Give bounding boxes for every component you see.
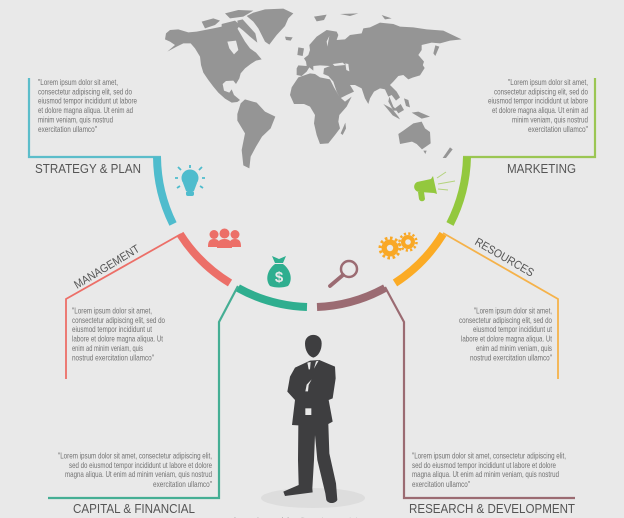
text block: research & development	[412, 450, 566, 489]
text block: management: enim ad minim veniam, quis	[72, 343, 143, 353]
text block: research & development: exercitation ullamco"	[412, 479, 470, 489]
text block: capital & financial: "Lorem ipsum dolor sit amet, consectetur adipiscing elit,	[58, 450, 212, 460]
text block: resources: consectetur adipiscing elit, sed do	[459, 315, 552, 325]
text block: research & development: sed do eiusmod tempor incididunt ut labore et dolore	[412, 460, 556, 470]
text block: capital & financial: magna aliqua. Ut enim ad minim veniam, quis nostrud	[65, 469, 212, 479]
icon: money bag: $	[275, 269, 284, 286]
text block: resources: labore et dolore magna aliqua. Ut	[461, 334, 552, 344]
text block: management: consectetur adipiscing elit, sed do	[72, 315, 165, 325]
text block: management: eiusmod tempor incididunt ut	[72, 324, 152, 334]
text block: marketing: et dolore magna aliqua. Ut enim ad	[492, 105, 588, 115]
text block: resources: eiusmod tempor incididunt ut	[473, 324, 552, 334]
icon: people	[208, 228, 241, 248]
text block: strategy & plan: consectetur adipiscing elit, sed do	[38, 86, 132, 96]
heading: capital & financial: CAPITAL & FINANCIAL	[73, 501, 195, 516]
text block: capital & financial: exercitation ullamco"	[153, 479, 212, 489]
arc: management	[180, 234, 230, 283]
connector: strategy & plan	[29, 78, 161, 157]
businessman shadow	[261, 488, 365, 508]
text block: resources: "Lorem ipsum dolor sit amet,	[474, 306, 552, 316]
text block: resources	[459, 306, 552, 362]
text block: capital & financial	[58, 450, 212, 489]
text block: resources: enim ad minim veniam, quis	[476, 343, 552, 353]
text block: strategy & plan: et dolore magna aliqua. Ut enim ad	[38, 105, 133, 115]
connector: resources	[443, 233, 558, 379]
text block: strategy & plan	[38, 77, 137, 134]
text block: research & development: magna aliqua. Ut enim ad minim veniam, quis nostrud	[412, 469, 559, 479]
heading: marketing: MARKETING	[507, 161, 576, 176]
connector: marketing	[463, 78, 595, 157]
connector: research & development	[385, 287, 575, 498]
text block: strategy & plan: "Lorem ipsum dolor sit amet,	[38, 77, 118, 87]
text block: management: "Lorem ipsum dolor sit amet,	[72, 306, 152, 316]
arc: research & development	[317, 288, 385, 307]
text block: strategy & plan: minim veniam, quis nostrud	[38, 115, 113, 125]
text block: marketing: eiusmod tempor incididunt ut labore	[488, 96, 588, 106]
arc: marketing	[450, 157, 467, 224]
arc: resources	[395, 234, 443, 283]
heading: strategy & plan: STRATEGY & PLAN	[35, 161, 141, 176]
arc: capital & financial	[238, 288, 307, 307]
text block: marketing: minim veniam, quis nostrud	[512, 115, 588, 125]
heading: research & development: RESEARCH & DEVELOPMENT	[409, 501, 575, 516]
text block: management: nostrud exercitation ullamco"	[72, 352, 154, 362]
icon: magnifier	[330, 261, 357, 286]
text block: strategy & plan: eiusmod tempor incididunt ut labore	[38, 96, 137, 106]
text block: management: labore et dolore magna aliqua. Ut	[72, 334, 163, 344]
world map	[165, 9, 462, 168]
icon: money bag	[267, 256, 291, 288]
text block: marketing: consectetur adipiscing elit, sed do	[494, 86, 588, 96]
arc: strategy & plan	[157, 157, 173, 224]
text block: resources: nostrud exercitation ullamco"	[470, 352, 552, 362]
icon: megaphone	[414, 172, 455, 201]
text block: research & development: "Lorem ipsum dolor sit amet, consectetur adipiscing elit,	[412, 450, 566, 460]
text block: management	[72, 306, 165, 362]
text block: marketing	[488, 77, 588, 134]
connector: capital & financial	[48, 286, 238, 498]
heading: resources: RESOURCES	[472, 236, 536, 280]
businessman silhouette	[283, 335, 337, 503]
icon: light bulb	[175, 165, 205, 196]
text block: strategy & plan: exercitation ullamco"	[38, 124, 97, 134]
text block: capital & financial: sed do eiusmod tempor incididunt ut labore et dolore	[69, 460, 212, 470]
heading: management: MANAGEMENT	[72, 243, 142, 292]
icon: gears	[380, 234, 416, 258]
text block: marketing: "Lorem ipsum dolor sit amet,	[508, 77, 588, 87]
text block: marketing: exercitation ullamco"	[528, 124, 588, 134]
connector: management	[66, 234, 181, 379]
